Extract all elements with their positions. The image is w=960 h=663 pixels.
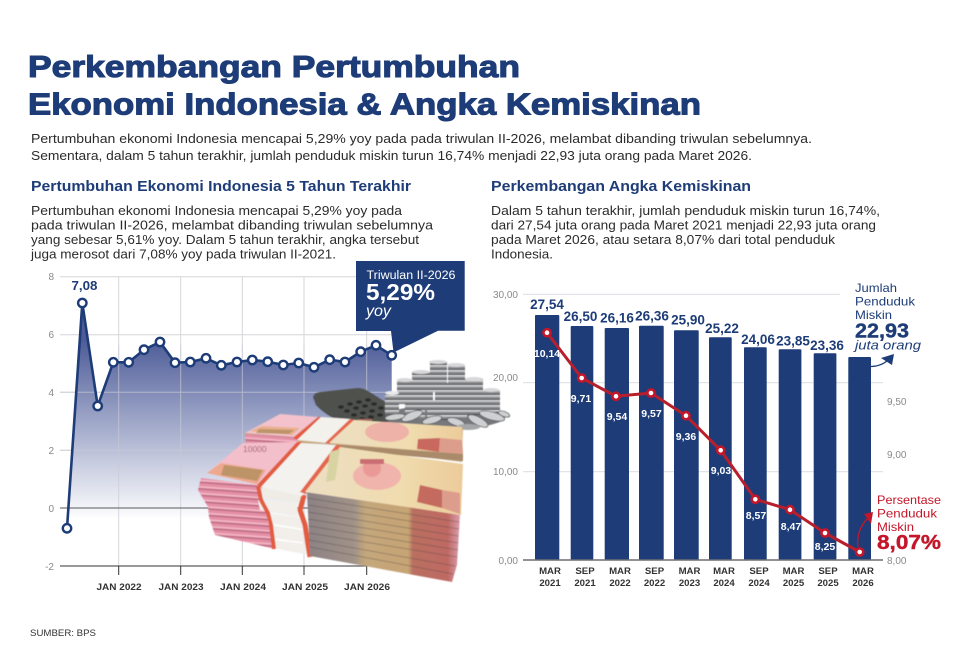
left axis labels: 20,00 <box>493 373 518 384</box>
bar value labels: 25,90 <box>671 312 705 328</box>
callout: Q2 2026 growth: yoy <box>365 303 392 320</box>
text block: economic growth <box>30 204 433 262</box>
bar value labels: 26,36 <box>635 308 669 324</box>
line chart: economic growth <box>45 272 396 593</box>
right axis labels <box>887 397 907 567</box>
poverty rate labels: 8,57 <box>746 510 766 522</box>
bar value labels: 25,22 <box>705 321 739 336</box>
bar chart: poverty <box>493 290 907 589</box>
x axis labels: SEP <box>575 566 595 577</box>
poverty rate line <box>547 333 860 552</box>
arrow <box>858 512 873 547</box>
x axis labels <box>539 566 874 589</box>
callout: poor population: Penduduk <box>855 294 916 308</box>
x axis labels: 2022 <box>644 578 665 589</box>
left axis labels <box>493 290 518 567</box>
x axis labels: 2022 <box>609 578 631 589</box>
callout: Q2 2026 growth: 5,29% <box>366 279 435 305</box>
peak label: 7,08 <box>72 279 98 293</box>
growth markers <box>63 299 396 532</box>
heading: poverty: Perkembangan Angka Kemiskinan <box>491 179 751 195</box>
text block: economic growth: pada triwulan II-2026, melambat dibanding triwulan sebelumnya <box>31 218 433 232</box>
calculator <box>313 388 395 426</box>
x axis labels: JAN 2023 <box>158 582 204 593</box>
bar value labels: 26,50 <box>564 309 597 324</box>
arrow <box>871 354 894 366</box>
x axis labels: 2021 <box>539 578 561 589</box>
front stack top <box>207 442 463 515</box>
left axis labels: 10,00 <box>493 467 518 478</box>
x axis labels: 2024 <box>748 578 770 589</box>
left axis labels: 30,00 <box>493 290 518 301</box>
x axis labels: MAR <box>713 566 735 577</box>
poverty rate labels <box>534 348 835 553</box>
title: Ekonomi Indonesia & Angka Kemiskinan <box>28 86 701 122</box>
y axis labels <box>45 272 54 573</box>
front stack left side <box>198 478 275 549</box>
x axis labels: MAR <box>679 566 700 577</box>
right axis labels: 8,00 <box>887 556 907 567</box>
intro text <box>31 132 812 163</box>
x axis labels: 2023 <box>679 578 700 589</box>
x axis labels: 2025 <box>817 578 839 589</box>
callout: poor population: Miskin <box>855 308 892 322</box>
left axis labels: 0,00 <box>499 556 518 567</box>
callout: poor population: 22,93 <box>855 320 909 342</box>
x axis labels: MAR <box>852 566 874 577</box>
x axis labels: MAR <box>539 566 561 577</box>
title: Perkembangan Pertumbuhan <box>28 49 520 84</box>
intro text: Pertumbuhan ekonomi Indonesia mencapai 5,29% yoy pada pada triwulan II-2026, melambat dibanding triwulan sebelumnya. <box>31 132 812 146</box>
x axis labels: SEP <box>645 566 665 577</box>
text block: economic growth: yang sebesar 5,61% yoy. Dalam 5 tahun terakhir, angka tersebut <box>31 233 420 247</box>
callout: poverty percentage: Miskin <box>877 520 914 534</box>
text block: economic growth: Pertumbuhan ekonomi Indonesia mencapai 5,29% yoy pada <box>31 204 402 218</box>
text block: poverty: Indonesia. <box>491 248 553 262</box>
x axis labels: SEP <box>818 566 838 577</box>
intro text: Sementara, dalam 5 tahun terakhir, jumlah penduduk miskin turun 16,74% menjadi 22,93 juta orang pada Maret 2026. <box>31 149 752 163</box>
y axis labels: 8 <box>48 272 54 283</box>
callout: poverty percentage <box>858 493 941 554</box>
x axis labels: JAN 2024 <box>220 582 267 593</box>
x axis labels: 2025 <box>783 578 805 589</box>
callout: poor population <box>853 281 922 366</box>
title <box>28 49 701 122</box>
bar value labels: 27,54 <box>530 297 564 312</box>
y axis labels: 4 <box>48 388 54 399</box>
x axis labels: 2024 <box>713 578 735 589</box>
x axis labels: MAR <box>609 566 631 577</box>
callout: poverty percentage: Penduduk <box>877 506 938 520</box>
bars <box>535 315 871 560</box>
x axis labels: JAN 2026 <box>344 582 390 593</box>
callout: poor population: juta orang <box>853 338 922 352</box>
poverty rate labels: 9,54 <box>607 411 627 423</box>
poverty rate labels: 9,03 <box>711 465 731 477</box>
source note: SUMBER: BPS <box>30 628 96 639</box>
poverty rate labels: 8,47 <box>781 521 801 533</box>
back stack of notes <box>245 414 463 462</box>
callout: poverty percentage: 8,07% <box>877 532 941 554</box>
bar value labels: 26,16 <box>600 310 634 326</box>
x axis labels: JAN 2022 <box>96 582 142 593</box>
right axis labels: 9,50 <box>887 397 907 408</box>
heading: economic growth: Pertumbuhan Ekonomi Indonesia 5 Tahun Terakhir <box>31 179 411 195</box>
x axis labels: 2021 <box>574 578 596 589</box>
poverty rate labels: 9,57 <box>641 408 662 420</box>
poverty rate labels: 9,71 <box>571 393 591 405</box>
bar value labels: 24,06 <box>741 332 775 347</box>
area fill <box>67 303 392 528</box>
bar value labels <box>530 297 844 353</box>
callout: poor population: Jumlah <box>855 281 897 295</box>
callout: poverty percentage: Persentase <box>877 493 941 507</box>
text block: poverty: Dalam 5 tahun terakhir, jumlah penduduk miskin turun 16,74%, <box>491 204 880 218</box>
text block: poverty: dari 27,54 juta orang pada Maret 2021 menjadi 22,93 juta orang <box>491 218 876 232</box>
poverty rate labels: 10,14 <box>534 348 560 360</box>
text block: economic growth: juga merosot dari 7,08% yoy pada triwulan II-2021. <box>30 248 336 262</box>
illustration: banknotes, calculator and coins <box>198 360 510 582</box>
coins <box>385 360 510 430</box>
x axis labels: SEP <box>749 566 769 577</box>
x axis labels: JAN 2025 <box>282 582 329 593</box>
poverty rate markers <box>543 329 863 556</box>
poverty rate labels: 8,25 <box>815 541 835 553</box>
bar value labels: 23,36 <box>810 338 844 353</box>
text block: poverty <box>491 204 880 262</box>
x axis labels <box>96 582 390 593</box>
right axis labels: 9,00 <box>887 450 907 461</box>
poverty rate labels: 9,36 <box>676 431 696 443</box>
y axis labels: 6 <box>48 330 54 341</box>
x axis labels: 2026 <box>852 578 874 589</box>
y axis labels: 2 <box>48 446 54 457</box>
front stack top: 10000 <box>243 444 267 454</box>
x axis labels: MAR <box>783 566 804 577</box>
y axis labels: 0 <box>48 504 54 515</box>
front stack band strips <box>258 486 310 557</box>
growth line <box>67 303 392 528</box>
front stack right side <box>307 491 460 582</box>
callout: Q2 2026 growth: Triwulan II-2026 <box>366 270 456 282</box>
bar value labels: 23,85 <box>776 334 810 348</box>
callout: Q2 2026 growth <box>356 261 465 352</box>
text block: poverty: pada Maret 2026, atau setara 8,07% dari total penduduk <box>491 233 836 247</box>
y axis labels: -2 <box>45 562 54 573</box>
